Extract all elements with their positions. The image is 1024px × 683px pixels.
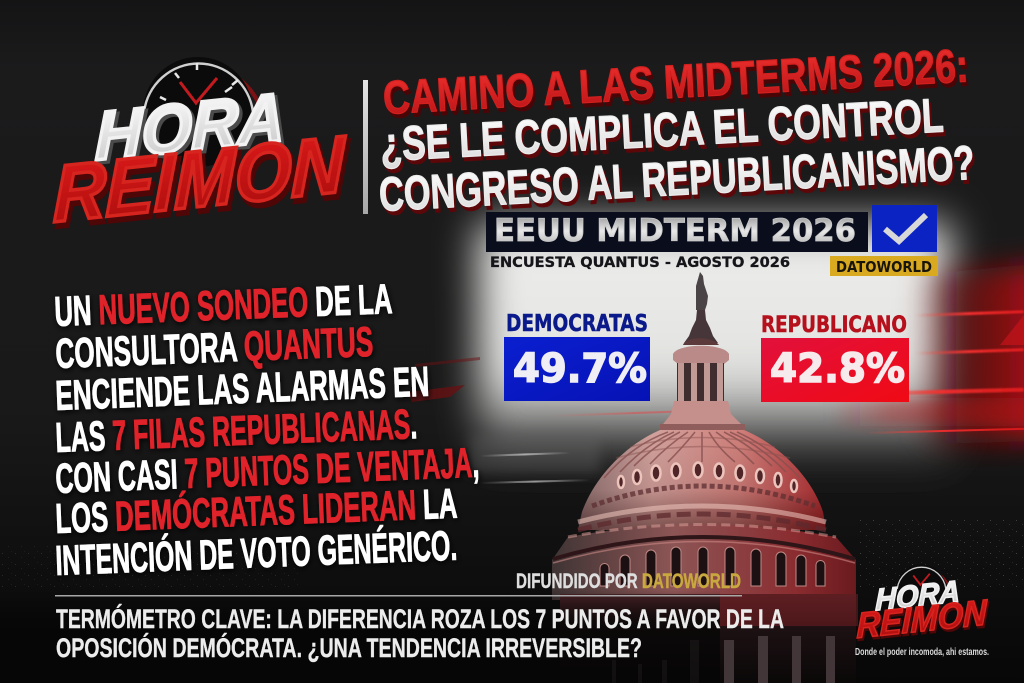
credit: difundido por Datoworld: DIFUNDIDO POR DATOWORLD — [516, 570, 741, 593]
result: Democratas: DEMOCRATAS — [506, 311, 648, 337]
tholos — [673, 346, 729, 364]
body line 3: ENCIENDE LAS ALARMAS EN — [55, 358, 430, 419]
clock — [143, 57, 262, 167]
icon: blue check box — [872, 205, 937, 252]
dome windows — [618, 462, 797, 492]
word: HORA: HORA — [98, 82, 288, 178]
footer rule — [55, 595, 742, 596]
poll title bar: EEUU MIDTERM 2026 — [494, 213, 856, 249]
body line 2: CONSULTORA QUANTUS — [55, 318, 374, 377]
poll subtitle: ENCUESTA QUANTUS - AGOSTO 2026 — [490, 255, 790, 271]
word: REIMON: REIMON — [53, 119, 346, 240]
drum windows — [600, 547, 825, 586]
result: Republicano: 42.8% — [770, 346, 905, 392]
body text block — [54, 275, 480, 584]
small logo: Hora Reimon: REIMON — [858, 594, 989, 648]
body line 1: UN NUEVO SONDEO DE LA — [54, 275, 393, 335]
lantern — [684, 310, 718, 343]
small logo: Hora Reimon: REIMON — [856, 592, 988, 646]
small logo: Hora Reimon — [855, 564, 989, 658]
body line 5: CON CASI 7 PUNTOS DE VENTAJA, — [55, 439, 480, 502]
dome ribs — [604, 432, 800, 478]
statue — [696, 272, 708, 310]
dome ornament bands — [592, 486, 815, 506]
logo: Hora Reimon — [53, 57, 349, 245]
body line 6: LOS DEMÓCRATAS LIDERAN LA — [55, 479, 458, 542]
body line 4: LAS 7 FILAS REPUBLICANAS. — [55, 400, 418, 461]
result: Democratas: 49.7% — [513, 346, 647, 392]
dome — [578, 430, 826, 530]
city lights texture — [0, 520, 1024, 590]
photo panel: light backdrop with red glow — [408, 222, 1024, 484]
result: Democratas — [504, 311, 650, 401]
result: Republicano — [761, 313, 909, 402]
footer line 2: OPOSICIÓN DEMÓCRATA. ¿UNA TENDENCIA IRREVERSIBLE? — [56, 632, 642, 663]
drum — [552, 524, 856, 600]
result: Republicano: REPUBLICANO — [761, 313, 907, 338]
word: HORA: HORA — [95, 79, 285, 175]
small logo: Hora Reimon: HORA — [875, 574, 960, 617]
lower colonnade — [560, 594, 856, 683]
body line 7: INTENCIÓN DE VOTO GENÉRICO. — [55, 521, 458, 584]
bottom shadow band — [0, 590, 720, 683]
word: REIMON: REIMON — [56, 124, 349, 245]
capitol illustration — [552, 272, 858, 683]
vertical divider — [363, 80, 368, 214]
badge: Datoworld: DATOWORLD — [836, 258, 932, 276]
headline — [378, 38, 978, 226]
footer text — [56, 603, 784, 663]
